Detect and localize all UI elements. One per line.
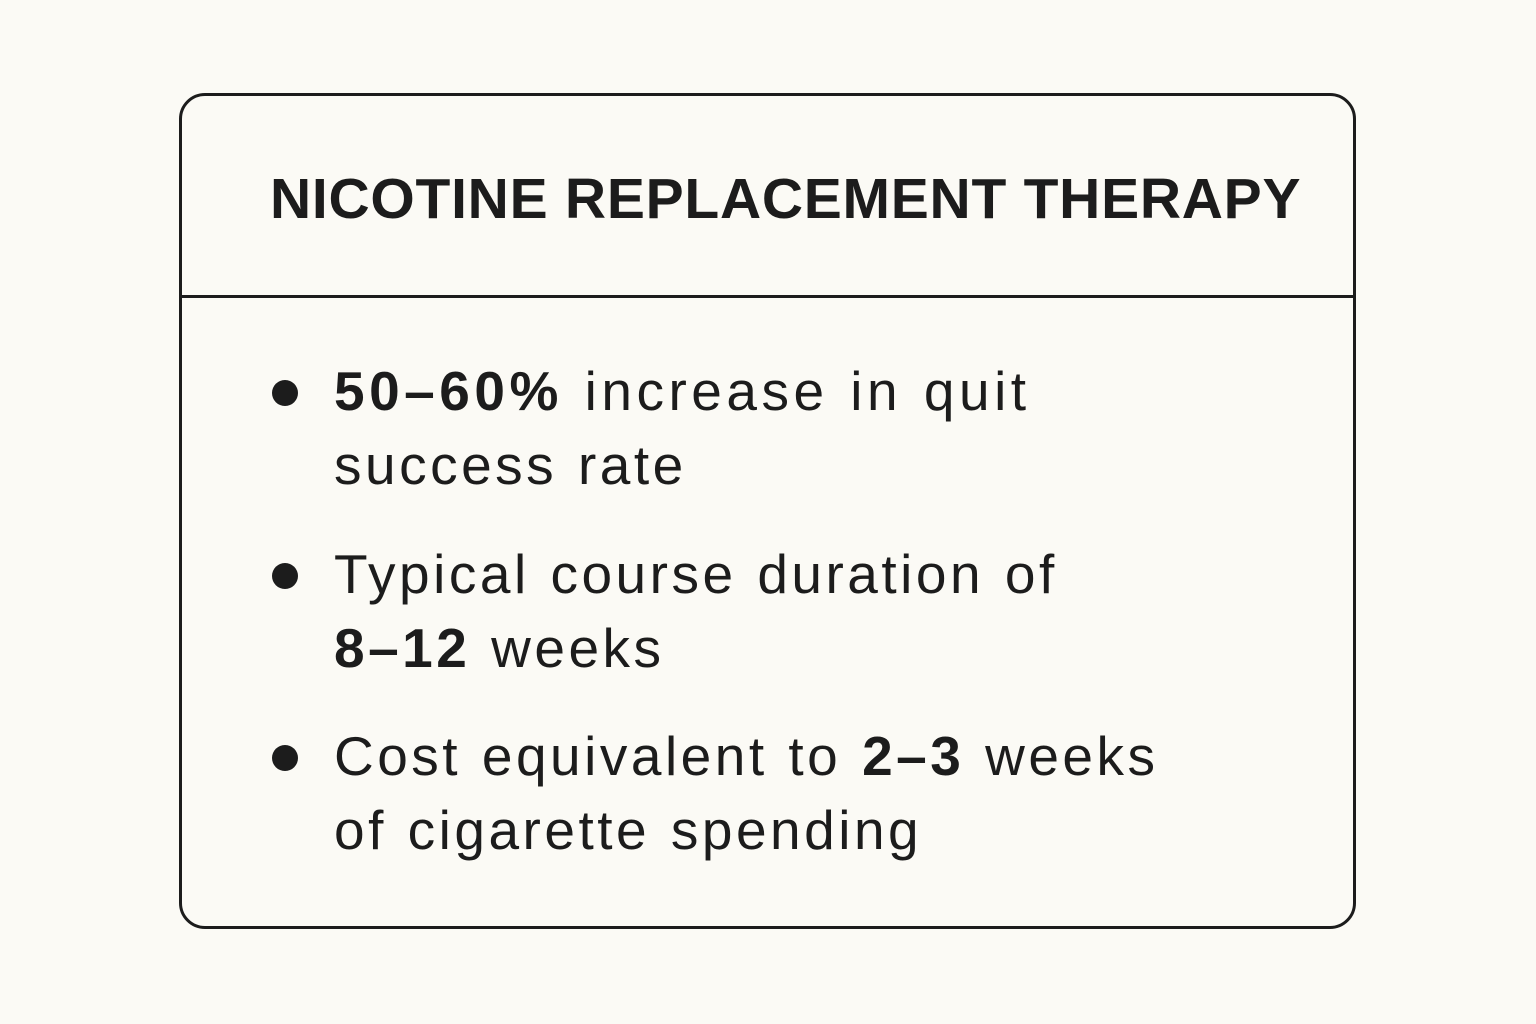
text block: bullet 2 <box>334 543 1058 679</box>
icon: bullet 3 <box>272 745 298 771</box>
text block: bullet 2: Typical course duration of <box>334 543 1058 605</box>
text block: bullet 3: of cigarette spending <box>334 799 922 861</box>
text block: bullet 3 <box>334 725 1159 861</box>
text block: bullet 1: 50–60% increase in quit <box>334 360 1031 422</box>
title: NICOTINE REPLACEMENT THERAPY <box>270 167 1301 231</box>
text block: bullet 1: success rate <box>334 434 687 496</box>
panel: card <box>179 93 1356 929</box>
text block: bullet 2: 8–12 weeks <box>334 617 665 679</box>
text block: bullet 1 <box>334 360 1031 496</box>
text block: bullet 3: Cost equivalent to 2–3 weeks <box>334 725 1159 787</box>
icon: bullet 1 <box>272 380 298 406</box>
icon: bullet 2 <box>272 563 298 589</box>
